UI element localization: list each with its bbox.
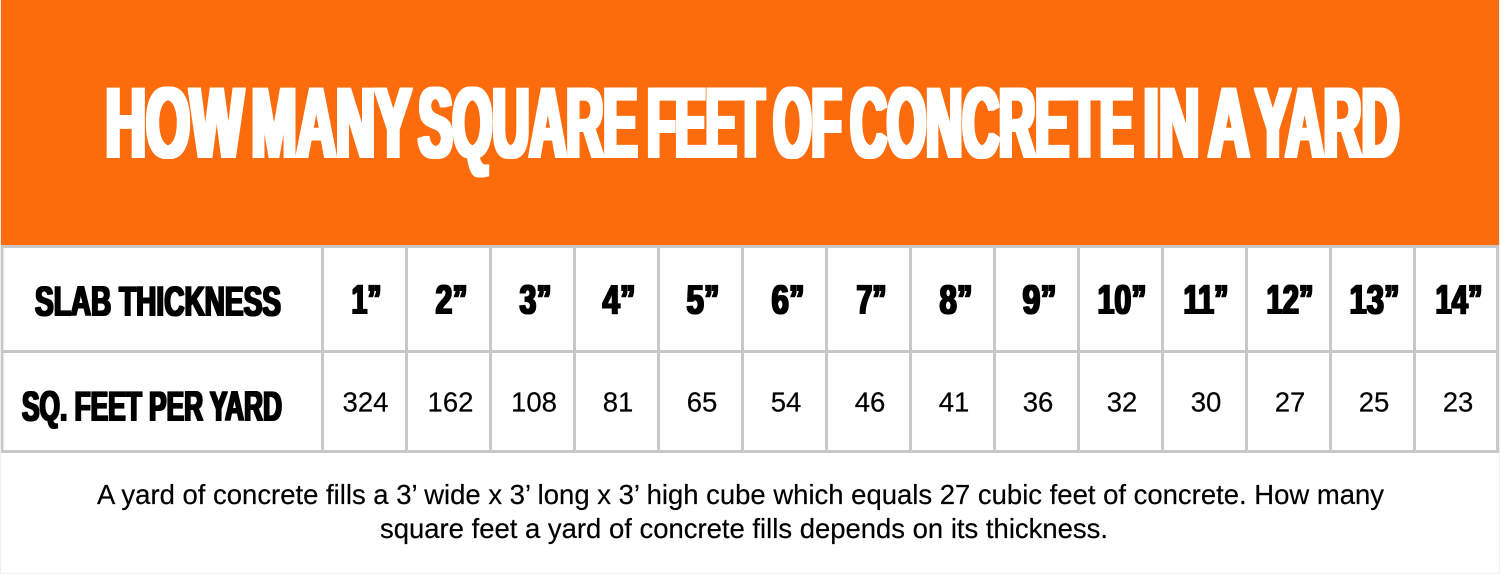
explanatory note: A yard of concrete fills a 3’ wide x 3’ long x 3’ high cube which equals 27 cubic feet of concrete. How many: [97, 479, 1384, 510]
thickness values: 6”: [772, 276, 804, 322]
thickness values: 11”: [1184, 276, 1228, 322]
square feet values: 324: [343, 386, 388, 418]
thickness values: 7”: [856, 276, 886, 322]
square feet values: 27: [1275, 386, 1305, 418]
title: A: [1208, 67, 1249, 178]
square feet values: 54: [771, 386, 801, 418]
thickness values: 1”: [352, 276, 382, 322]
thickness values: 5”: [686, 276, 720, 322]
square feet values: 36: [1023, 386, 1053, 418]
title: MANY: [251, 67, 411, 178]
thickness values: 8”: [940, 276, 972, 322]
row header: square feet per yard: SQ. FEET PER YARD: [22, 382, 282, 430]
square feet values: 23: [1443, 386, 1473, 418]
square feet values: [343, 386, 1473, 418]
square feet values: 81: [603, 386, 633, 418]
thickness values: 9”: [1022, 276, 1056, 322]
thickness values: 2”: [436, 276, 468, 322]
square feet values: 25: [1359, 386, 1389, 418]
square feet values: 65: [687, 386, 717, 418]
square feet values: 32: [1107, 386, 1137, 418]
explanatory note: square feet a yard of concrete fills depends on its thickness.: [380, 513, 1108, 544]
title: OF: [773, 67, 841, 178]
title: IN: [1143, 67, 1199, 178]
square feet values: 41: [939, 386, 969, 418]
square feet values: 30: [1191, 386, 1221, 418]
title: FEET: [647, 67, 764, 178]
square feet values: 46: [855, 386, 885, 418]
thickness values: 3”: [520, 276, 552, 322]
thickness values: 10”: [1098, 276, 1146, 322]
title: CONCRETE: [850, 67, 1133, 178]
row header: slab thickness: SLAB THICKNESS: [35, 278, 281, 324]
square feet values: 162: [428, 386, 473, 418]
square feet values: 108: [511, 386, 557, 418]
thickness values: [352, 276, 1482, 322]
table: [1, 245, 1499, 453]
title: SQUARE: [418, 67, 637, 178]
table grid: [1, 245, 1499, 453]
thickness values: 14”: [1436, 276, 1482, 322]
thickness values: 4”: [602, 276, 636, 322]
thickness values: 13”: [1350, 276, 1400, 322]
title: HOW: [105, 67, 244, 178]
title: [105, 67, 1399, 178]
thickness values: 12”: [1266, 276, 1314, 322]
explanatory note: [97, 479, 1384, 544]
panel: title banner: [1, 0, 1499, 245]
